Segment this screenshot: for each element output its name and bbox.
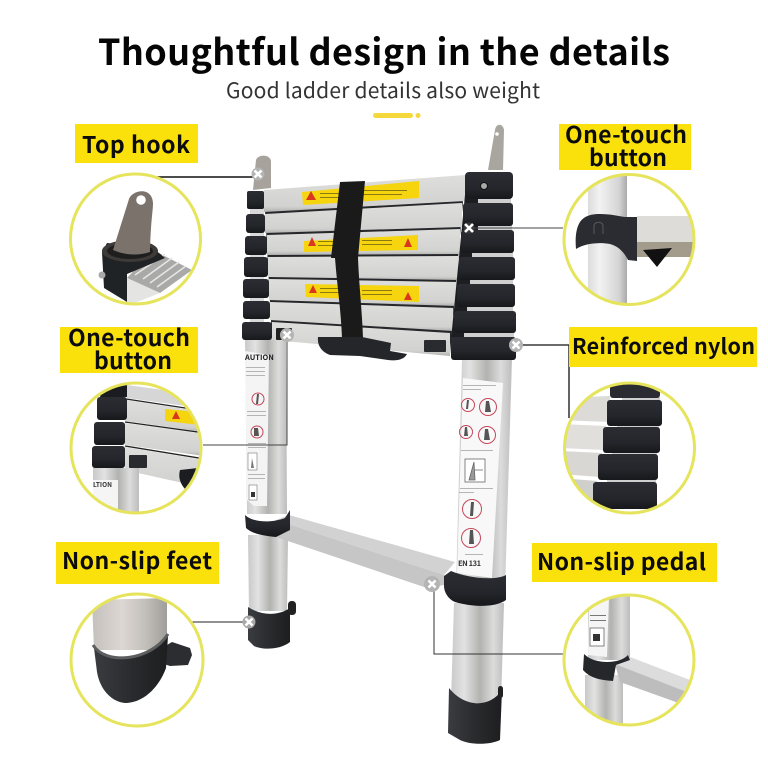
label: One-touch button left: button (94, 342, 172, 376)
right lower leg (451, 603, 504, 703)
ladder illustration (242, 125, 516, 744)
detail circle: top hook (70, 174, 200, 306)
left upper leg: AUTION (244, 352, 274, 363)
detail circle: reinforced nylon (560, 383, 694, 513)
right caps with rings (451, 172, 516, 360)
left upper leg (244, 338, 287, 514)
marker: right button (464, 222, 474, 234)
warning stickers (302, 181, 419, 302)
top hooks (253, 125, 504, 190)
buttons (276, 328, 446, 352)
connector lines (157, 177, 569, 654)
detail circle: left button: LTION (93, 479, 112, 489)
left foot (248, 601, 296, 649)
label: Reinforced nylon: Reinforced nylon (572, 330, 755, 361)
marker: left button (280, 328, 294, 342)
left collar (245, 510, 290, 537)
label: Top hook: Top hook (82, 126, 190, 160)
rungs (264, 175, 465, 356)
label: One-touch button right (559, 116, 691, 173)
detail circle: right button (564, 172, 695, 308)
rung backing (264, 177, 465, 354)
label: One-touch button left (60, 319, 198, 376)
left lower leg (248, 535, 288, 611)
marker: nylon (509, 338, 523, 352)
title: Thoughtful design in the details (98, 24, 670, 76)
marker: top hook (252, 168, 264, 180)
accent bar (373, 113, 420, 118)
right collar (444, 571, 506, 606)
label: Non-slip pedal: Non-slip pedal (537, 543, 706, 577)
strap (331, 181, 365, 338)
detail circle: non-slip feet (71, 594, 203, 726)
right foot (448, 686, 503, 744)
right upper leg (456, 358, 512, 590)
label: Non-slip feet: Non-slip feet (62, 542, 212, 576)
pedal (276, 515, 455, 588)
right upper leg: EN 131 (458, 558, 481, 569)
marker: feet (242, 616, 256, 628)
detail circle: left button (71, 383, 205, 514)
label: One-touch button left: One-touch (68, 319, 190, 353)
label: One-touch button right: button (589, 139, 667, 173)
handle (318, 337, 407, 360)
marker: pedal (424, 576, 440, 592)
label: One-touch button right: One-touch (565, 116, 687, 150)
subtitle: Good ladder details also weight (226, 75, 540, 105)
left caps (242, 191, 272, 340)
detail circle: non-slip pedal (564, 594, 694, 725)
